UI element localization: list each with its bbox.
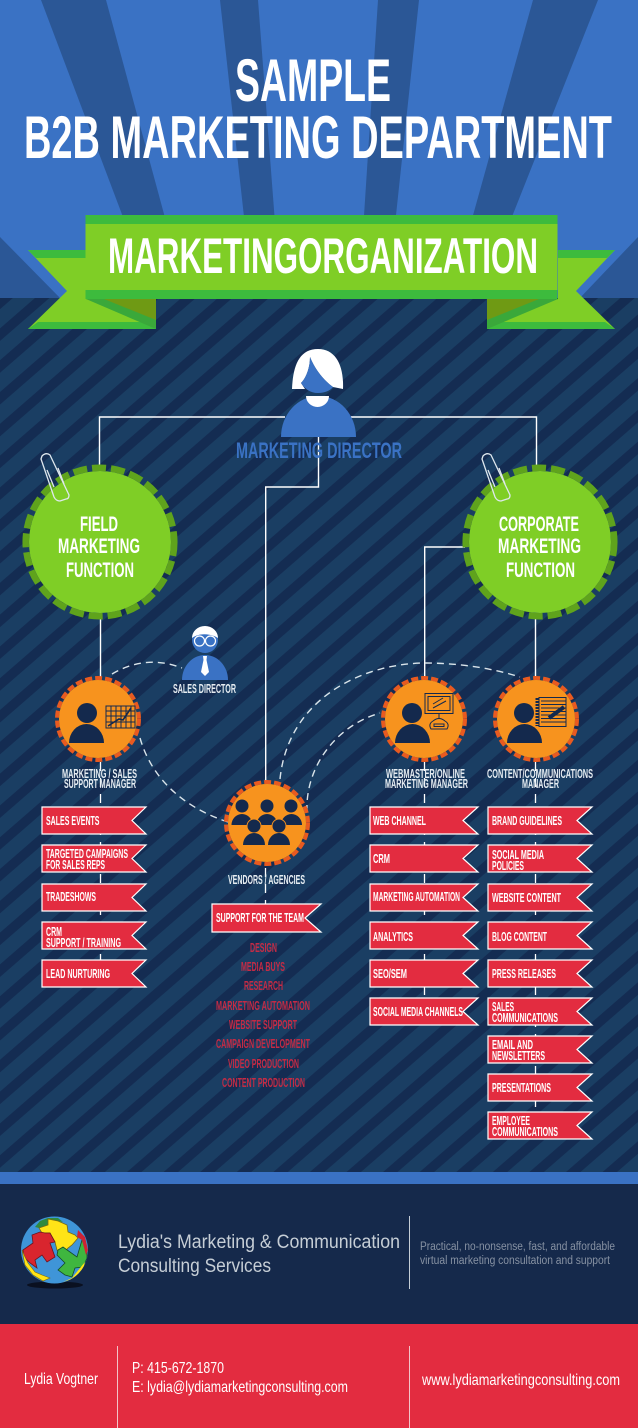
ribbon: CRM: [373, 852, 390, 866]
ribbon: SUPPORT / TRAINING: [46, 936, 121, 950]
green banner: [28, 215, 615, 329]
marketing / sales support manager: MARKETING / SALES: [62, 767, 137, 781]
ribbon: [370, 845, 478, 872]
marketing / sales support manager: SUPPORT MANAGER: [64, 777, 136, 791]
ribbon: EMAIL AND: [492, 1038, 533, 1052]
icon: chart grid: [106, 706, 135, 728]
phone and email: [132, 1360, 348, 1396]
content / communications manager: MANAGER: [522, 777, 559, 791]
sales director: SALES DIRECTOR: [173, 682, 236, 696]
director label: MARKETING DIRECTOR: [236, 438, 402, 463]
ribbon: TARGETED CAMPAIGNS: [46, 847, 128, 861]
icon: director collar: [306, 396, 329, 407]
corporate marketing function: CORPORATE: [499, 513, 579, 536]
ribbon: TRADESHOWS: [46, 890, 96, 904]
tagline: [420, 1241, 615, 1267]
tagline: virtual marketing consultation and support: [420, 1255, 611, 1267]
ribbon: NEWSLETTERS: [492, 1049, 545, 1063]
vendors / agencies: [226, 782, 308, 887]
ribbon: COMMUNICATIONS: [492, 1125, 558, 1139]
ribbon: [488, 998, 592, 1025]
ribbon: ANALYTICS: [373, 930, 413, 944]
tagline: Practical, no-nonsense, fast, and affordable: [420, 1241, 615, 1253]
ribbon: [488, 1074, 592, 1101]
ribbon: MARKETING AUTOMATION: [373, 890, 460, 904]
support list: CAMPAIGN DEVELOPMENT: [216, 1037, 310, 1051]
phone and email: E: lydia@lydiamarketingconsulting.com: [132, 1379, 348, 1396]
ribbon: [42, 960, 146, 987]
phone and email: P: 415-672-1870: [132, 1360, 224, 1377]
ribbon: EMPLOYEE: [492, 1114, 530, 1128]
ribbon: [488, 1112, 592, 1139]
title: [24, 47, 612, 171]
support list: [216, 941, 310, 1090]
ribbons: webmaster column: [370, 807, 478, 1025]
ribbon: PRESENTATIONS: [492, 1081, 551, 1095]
ribbon: support for the team: [212, 904, 321, 932]
contact name: Lydia Vogtner: [24, 1371, 99, 1388]
ribbon: FOR SALES REPS: [46, 858, 105, 872]
webmaster / online marketing manager: MARKETING MANAGER: [385, 777, 468, 791]
ribbon: [42, 884, 146, 911]
ribbon: [488, 922, 592, 949]
marketing / sales support manager: [57, 678, 139, 791]
connector lines: [100, 417, 536, 1114]
ribbon: [488, 884, 592, 911]
ribbons: content column: [488, 807, 592, 1139]
icon: person: [69, 703, 104, 743]
ribbon: [42, 845, 146, 872]
webmaster / online marketing manager: [383, 678, 468, 791]
sales director: [173, 626, 236, 696]
ribbon: [370, 807, 478, 834]
support list: RESEARCH: [244, 979, 283, 993]
icon: director body: [281, 396, 356, 437]
vendors / agencies: VENDORS / AGENCIES: [228, 873, 305, 887]
ribbon: SOCIAL MEDIA CHANNELS: [373, 1005, 463, 1019]
company name: [118, 1232, 400, 1277]
ribbon: [370, 960, 478, 987]
ribbon: POLICIES: [492, 859, 524, 873]
banner right tail: [487, 250, 615, 329]
icon: monitor and mouse: [425, 694, 453, 729]
icon: person: [507, 703, 542, 743]
ribbon: [370, 998, 478, 1025]
icon: director hair: [292, 349, 343, 389]
icon: person: [395, 703, 430, 743]
ribbon: [488, 807, 592, 834]
ribbon: [370, 922, 478, 949]
ribbon: [42, 922, 146, 950]
company name: Lydia's Marketing & Communication: [118, 1232, 400, 1253]
content / communications manager: [487, 678, 593, 791]
icon: paperclip: [41, 454, 69, 501]
support list: DESIGN: [250, 941, 277, 955]
support list: WEBSITE SUPPORT: [229, 1018, 297, 1032]
support list: MARKETING AUTOMATION: [216, 999, 310, 1013]
field marketing function: [26, 454, 174, 616]
ribbon: BRAND GUIDELINES: [492, 814, 562, 828]
icon: paperclip: [482, 454, 510, 501]
support list: MEDIA BUYS: [241, 960, 285, 974]
ribbon: [488, 960, 592, 987]
banner left tail: [28, 250, 156, 329]
ribbon: SALES: [492, 1000, 514, 1014]
icon: director face: [301, 357, 333, 393]
icon: sales director: [182, 626, 228, 680]
field marketing function: FIELD: [80, 513, 118, 536]
ribbon: WEB CHANNEL: [373, 814, 426, 828]
ribbon: [42, 807, 146, 834]
field marketing function: FUNCTION: [66, 559, 134, 582]
ribbon: [370, 884, 478, 911]
icon: notebook and pen: [537, 698, 566, 726]
ribbon: SALES EVENTS: [46, 814, 100, 828]
corporate marketing function: [466, 454, 614, 616]
title: SAMPLE: [235, 47, 391, 114]
icon: team: [232, 800, 302, 845]
ribbon: support for the team: SUPPORT FOR THE TEAM: [216, 911, 304, 925]
ribbon: SOCIAL MEDIA: [492, 848, 544, 862]
ribbon: CRM: [46, 925, 62, 939]
support list: CONTENT PRODUCTION: [222, 1076, 305, 1090]
support list: VIDEO PRODUCTION: [228, 1057, 299, 1071]
ribbon: [488, 845, 592, 873]
ribbon: [488, 1036, 592, 1063]
blue separator band: [0, 1172, 638, 1184]
ribbon: LEAD NURTURING: [46, 967, 110, 981]
dashed relationship arcs: [112, 662, 520, 822]
ribbon: PRESS RELEASES: [492, 967, 556, 981]
company footer panel: [0, 1184, 638, 1324]
header background with rays: [0, 0, 638, 300]
marketing director: [236, 349, 402, 463]
banner body: [86, 215, 558, 299]
ribbons: marketing / sales column: [42, 807, 146, 987]
icon: puzzle globe: [20, 1216, 90, 1288]
ribbon: COMMUNICATIONS: [492, 1011, 558, 1025]
field marketing function: MARKETING: [58, 535, 140, 558]
contact footer panel: [0, 1324, 638, 1428]
corporate marketing function: MARKETING: [498, 535, 581, 558]
company name: Consulting Services: [118, 1256, 271, 1277]
corporate marketing function: FUNCTION: [506, 559, 575, 582]
ribbon: SEO/SEM: [373, 967, 407, 981]
ribbon: WEBSITE CONTENT: [492, 891, 561, 905]
striped main background: [0, 298, 638, 1172]
webmaster / online marketing manager: WEBMASTER/ONLINE: [386, 767, 465, 781]
ribbon: BLOG CONTENT: [492, 930, 547, 944]
